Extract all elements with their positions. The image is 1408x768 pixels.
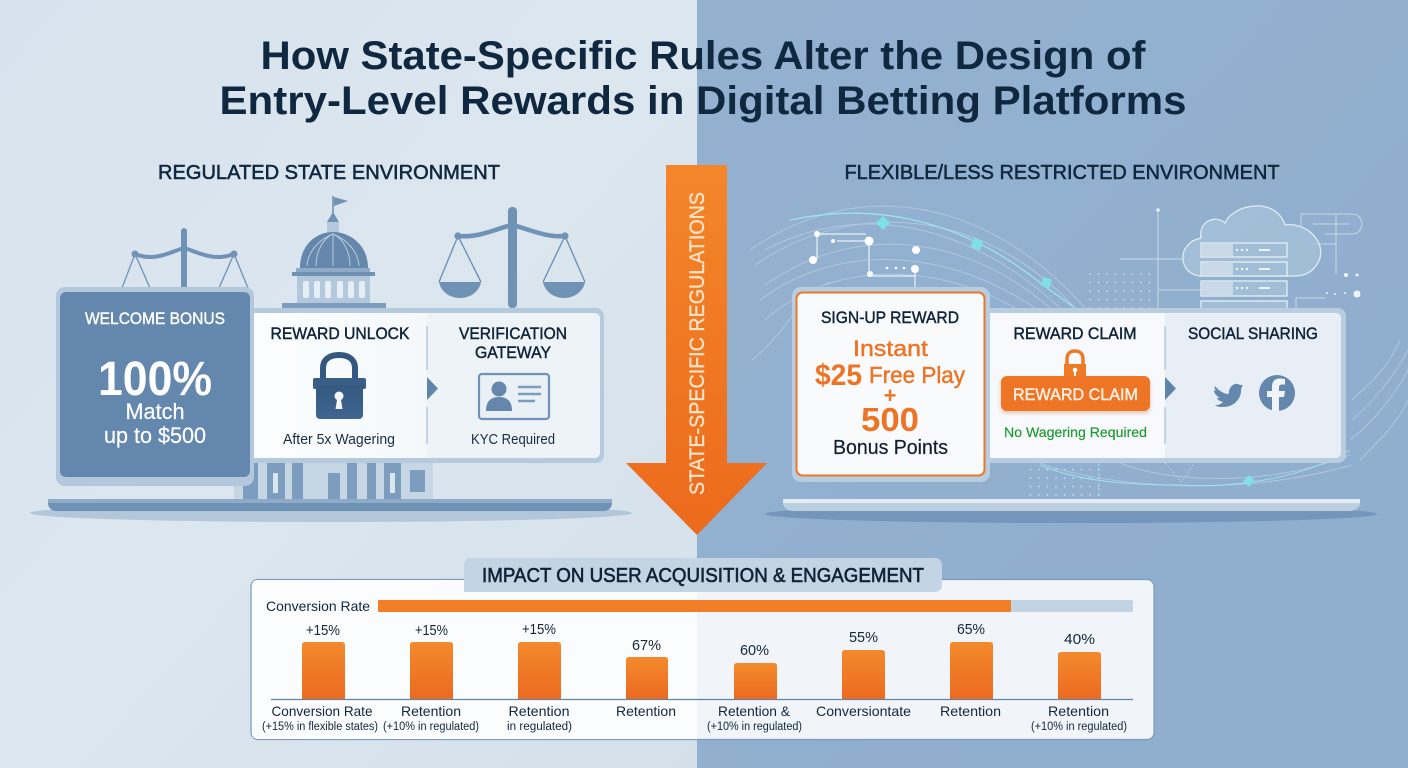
bar 5 <box>707 642 802 733</box>
divider and arrow <box>427 326 438 444</box>
button: reward claim <box>1001 376 1150 413</box>
conversion rate progress bar <box>266 598 1133 614</box>
background: regulated side <box>0 0 697 768</box>
arrow: state-specific regulations: STATE-SPECIFIC REGULATIONS <box>686 192 709 495</box>
bar chart <box>262 621 1133 733</box>
reward unlock column: After 5x Wagering <box>283 432 395 448</box>
bar 6: Conversiontate <box>816 703 911 719</box>
bar 3: Retention <box>508 703 570 719</box>
card: sign-up reward: Bonus Points <box>833 437 948 459</box>
bar 6 <box>816 629 911 719</box>
bar 1: (+15% in flexible states) <box>262 721 378 733</box>
card: welcome bonus: 100% <box>98 353 212 406</box>
card: sign-up reward: + <box>884 383 896 408</box>
icon: cloud with servers <box>1120 206 1362 309</box>
panel: impact on user acquisition and engagement <box>251 558 1154 740</box>
bar 5: (+10% in regulated) <box>707 721 802 733</box>
reward unlock column: REWARD UNLOCK <box>270 324 410 343</box>
bar 2: +15% <box>415 622 448 639</box>
icon: network nodes <box>790 213 1350 487</box>
bar 1 <box>262 622 378 733</box>
icon: left scales of justice <box>122 228 248 290</box>
icon: capitol building top <box>282 196 386 308</box>
reward claim column <box>1001 324 1150 440</box>
bar 1: Conversion Rate <box>272 703 373 719</box>
bar 3: +15% <box>522 621 556 638</box>
bar 3 <box>507 621 572 733</box>
panel: flexible flow <box>980 308 1346 463</box>
title <box>220 34 1186 123</box>
bar 6: 55% <box>849 629 878 646</box>
panel: regulated flow <box>240 308 604 463</box>
bar 5: 60% <box>740 642 769 659</box>
card: welcome bonus: up to $500 <box>104 423 206 448</box>
conversion rate progress bar: Conversion Rate <box>266 598 370 614</box>
arrow: state-specific regulations <box>626 165 767 535</box>
bar 7 <box>940 621 1001 719</box>
icon: capitol building base <box>234 458 433 499</box>
bar 4: 67% <box>632 637 661 654</box>
social sharing column: SOCIAL SHARING <box>1188 324 1318 343</box>
reward claim column: No Wagering Required <box>1004 424 1147 440</box>
dot grids <box>1027 268 1194 500</box>
bar 3: in regulated) <box>507 721 572 733</box>
title: Entry-Level Rewards in Digital Betting Platforms <box>220 79 1186 123</box>
bar 1: +15% <box>306 622 340 639</box>
card: sign-up reward <box>792 287 990 482</box>
card: sign-up reward: SIGN-UP REWARD <box>821 308 959 327</box>
verification gateway column: VERIFICATION <box>459 324 567 343</box>
verification gateway column <box>459 324 567 448</box>
bar 7: 65% <box>957 621 985 638</box>
bar 2: (+10% in regulated) <box>383 721 479 733</box>
bar 2: Retention <box>401 703 461 719</box>
card: welcome bonus: WELCOME BONUS <box>85 309 225 328</box>
icon: padlock <box>313 355 366 419</box>
card: sign-up reward: Instant <box>853 336 928 361</box>
heading tab: IMPACT ON USER ACQUISITION & ENGAGEMENT <box>482 565 924 587</box>
title: How State-Specific Rules Alter the Design of <box>260 34 1146 78</box>
bar 5: Retention & <box>718 703 791 719</box>
bar 8: Retention <box>1048 703 1109 719</box>
bar 4: Retention <box>616 703 676 719</box>
card: welcome bonus: Match <box>126 399 184 424</box>
bar 8: 40% <box>1064 631 1095 648</box>
reward unlock column <box>270 324 410 448</box>
decorative network lines: flexible side <box>750 206 1408 486</box>
card: sign-up reward: 500 <box>861 401 919 438</box>
card: sign-up reward: $25 <box>815 359 862 392</box>
social sharing column <box>1188 324 1318 411</box>
bar 7: Retention <box>940 703 1001 719</box>
bar 8 <box>1031 631 1127 733</box>
laptop base: regulated <box>30 499 632 522</box>
bar 2 <box>383 622 479 733</box>
card: sign-up reward: Free Play <box>869 362 965 388</box>
divider and arrow <box>1165 326 1176 444</box>
laptop base: flexible <box>765 499 1377 523</box>
button: reward claim: REWARD CLAIM <box>1013 385 1138 404</box>
heading: regulated state environment: REGULATED STATE ENVIRONMENT <box>158 162 500 184</box>
card: welcome bonus <box>56 287 254 486</box>
bar 4 <box>616 637 676 719</box>
verification gateway column: GATEWAY <box>475 343 551 362</box>
bar 8: (+10% in regulated) <box>1031 721 1127 733</box>
reward claim column: REWARD CLAIM <box>1014 324 1136 343</box>
icon: id card <box>479 374 549 419</box>
heading: flexible environment: FLEXIBLE/LESS RESTRICTED ENVIRONMENT <box>844 162 1280 184</box>
icon: facebook <box>1259 375 1295 411</box>
heading tab <box>464 558 942 592</box>
icon: orange padlock <box>1064 351 1086 380</box>
icon: right scales of justice <box>439 207 585 308</box>
icon: bird <box>1214 384 1243 407</box>
verification gateway column: KYC Required <box>471 432 555 448</box>
background: flexible side <box>697 0 1408 768</box>
